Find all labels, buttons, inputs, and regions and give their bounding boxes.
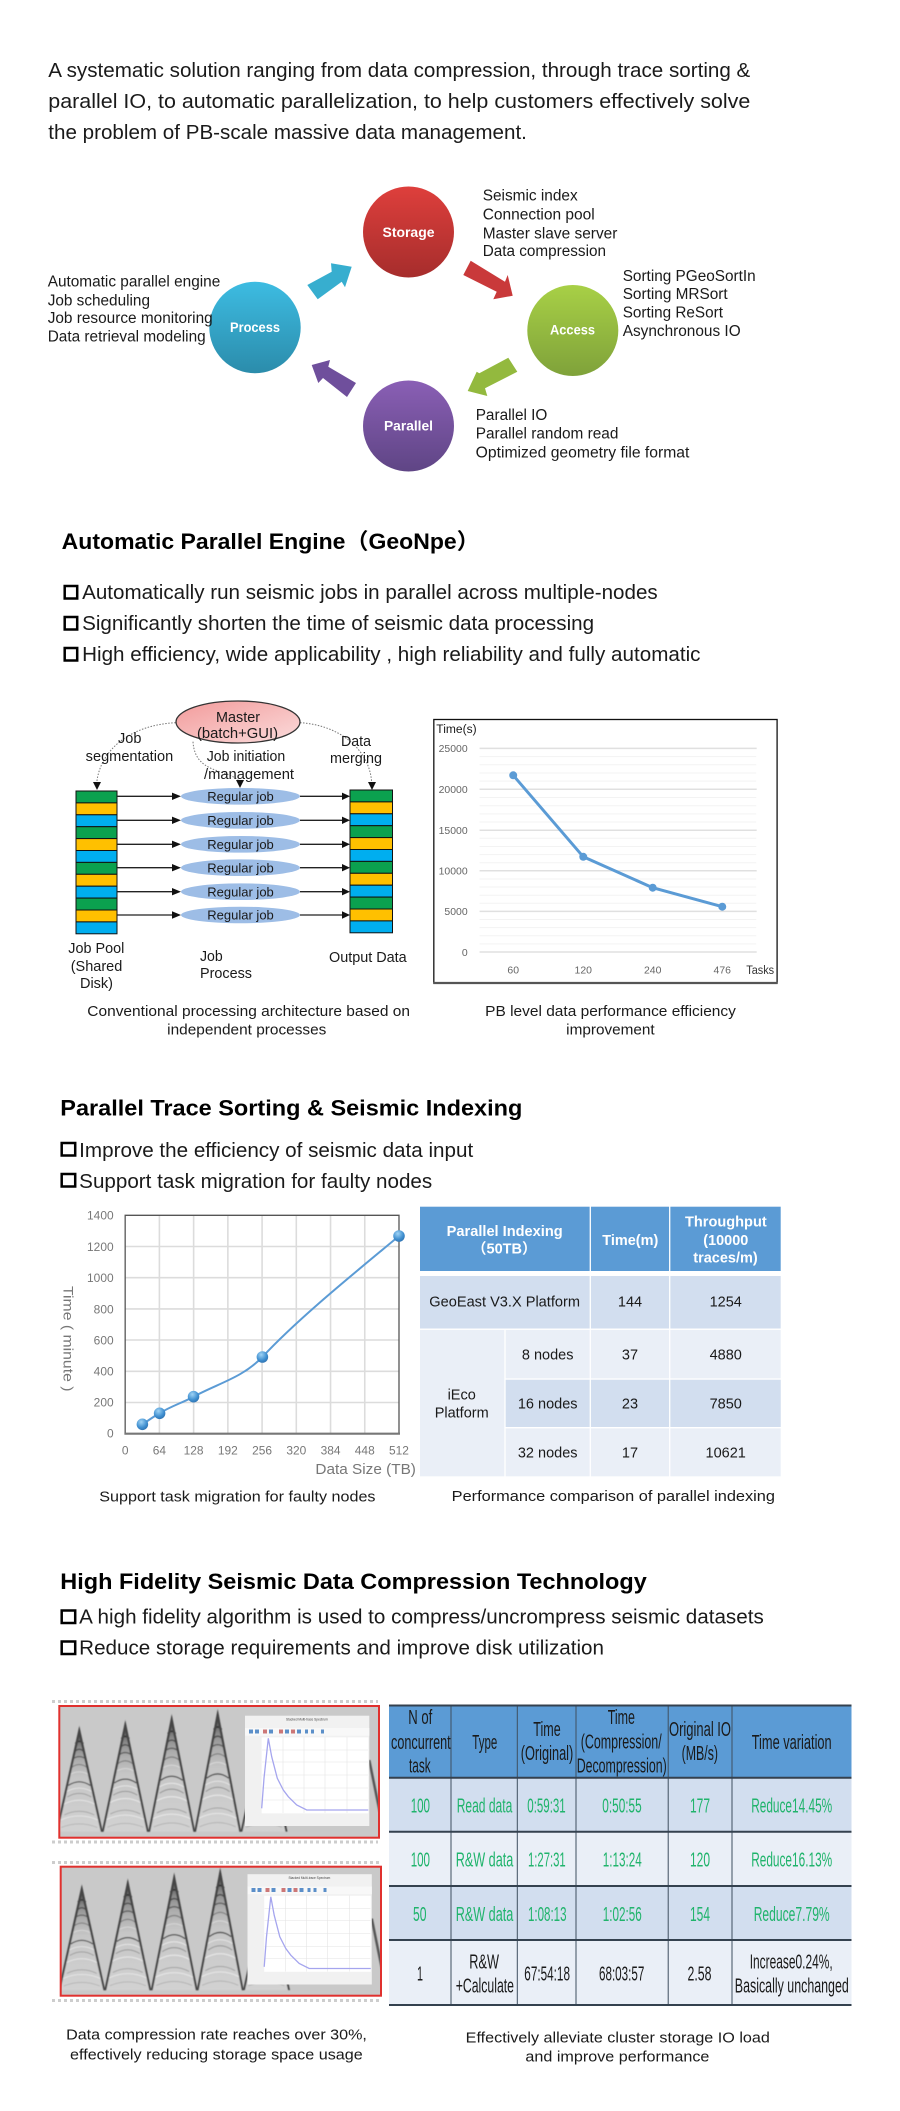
seismic section image: compressed [52,1858,388,2004]
list: parallel features: Optimized geometry file format [476,444,690,461]
captions: automatic parallel engine [87,1004,737,1039]
row: r&w data 50: 1:08:13 [528,1904,566,1926]
table: parallel indexing comparison: 4880 [710,1347,742,1363]
diagram labels: Job [118,731,141,747]
line chart: sorting time vs data size: 64 [153,1443,166,1458]
table: parallel indexing comparison: 23 [622,1396,638,1412]
header row: concurrent [391,1732,451,1754]
line chart: sorting time vs data size: 512 [389,1443,409,1458]
intro paragraph: the problem of PB-scale massive data management. [48,121,527,144]
list: storage features: Seismic index [483,188,578,205]
line chart: sorting time vs data size: 192 [218,1443,238,1458]
list: access features: Asynchronous IO [623,323,741,340]
captions: automatic parallel engine: Conventional processing architecture based on [87,1004,410,1020]
line chart: PB level performance: 60 [507,965,519,977]
captions: parallel trace sorting: Support task migration for faulty nodes [99,1490,376,1506]
table: parallel indexing comparison: Time(m) [602,1233,658,1249]
header row: Time [533,1719,561,1741]
table: parallel indexing comparison: （50TB） [472,1240,536,1257]
diagram labels: /management [204,767,294,783]
line chart: PB level performance: 5000 [444,907,468,918]
master ellipse: Master [216,710,260,726]
line chart: sorting time vs data size: 384 [321,1443,341,1458]
line chart: sorting time vs data size: 256 [252,1443,272,1458]
master ellipse: (batch+GUI) [197,726,278,742]
line chart: sorting time vs data size: 400 [94,1364,114,1379]
captions: automatic parallel engine: independent processes [167,1023,326,1039]
regular job ellipses: Regular job [207,813,274,828]
table: parallel indexing comparison: Platform [435,1405,489,1421]
line chart: sorting time vs data size: 800 [94,1302,114,1317]
list: process features: Job scheduling [48,292,150,310]
row: r&w calculate: R&W [469,1951,499,1973]
row: r&w calculate: 1 [417,1964,423,1986]
header row: (Original) [521,1743,573,1765]
diagram labels: segmentation [86,749,173,765]
bullets: parallel trace sorting: Improve the efficiency of seismic data input [79,1139,474,1162]
row: r&w calculate: 68:03:57 [599,1964,644,1986]
diagram labels: Data [341,734,372,750]
line chart: PB level performance: 476 [714,965,731,977]
bullets: automatic parallel engine: High efficiency, wide applicability , high reliability and fully automatic [82,643,701,666]
table: parallel indexing comparison: 1254 [710,1295,742,1311]
row: read data 100: 0:50:55 [602,1796,642,1818]
table: parallel indexing comparison: 7850 [710,1396,742,1412]
row: read data 100: Read data [457,1796,513,1818]
captions: data compression: Data compression rate reaches over 30%, [66,2028,367,2044]
table: parallel indexing comparison: 17 [622,1446,638,1462]
row: r&w data 50: 1:02:56 [603,1904,642,1926]
row: r&w data 100: 1:13:24 [603,1850,642,1872]
list: process features [48,274,220,346]
diagram labels: Job [200,949,223,965]
row: r&w calculate [417,1951,849,1998]
row: r&w data 50 [413,1904,830,1926]
line chart: sorting time vs data size: 128 [184,1443,204,1458]
list: process features: Job resource monitoring [48,310,213,327]
header row: Type [472,1732,497,1754]
diagram: conventional processing architecture [68,701,408,992]
node: parallel [363,380,454,472]
line chart: sorting time vs data size: 600 [94,1333,114,1348]
row: r&w calculate: +Calculate [456,1976,514,1998]
table: parallel indexing comparison: 37 [622,1347,638,1363]
line chart: sorting time vs data size: 1400 [87,1208,114,1223]
table: parallel indexing comparison: Throughput [685,1215,767,1231]
node: storage [363,186,454,278]
list: parallel features: Parallel random read [476,426,618,443]
regular job ellipses: Regular job [207,860,274,875]
line chart: sorting time vs data size: 448 [355,1443,375,1458]
dotted connectors [97,723,372,783]
row: read data 100: 0:59:31 [527,1796,566,1818]
list: access features: Sorting MRSort [623,286,728,303]
row: r&w data 50: R&W data [456,1904,514,1926]
line chart: sorting time vs data size: 0 [122,1443,129,1458]
row: read data 100: 177 [690,1796,710,1818]
intro paragraph: A systematic solution ranging from data compression, through trace sorting & [48,59,751,82]
captions: parallel trace sorting: Performance comparison of parallel indexing [452,1489,775,1505]
table: parallel indexing comparison: 8 nodes [522,1347,574,1363]
regular job ellipses: Regular job [207,789,274,804]
node: storage: Storage [382,225,435,240]
table: parallel indexing comparison: traces/m) [693,1251,758,1267]
regular job ellipses [181,788,300,923]
line chart: sorting time vs data size: Data Size (TB) [315,1462,416,1478]
table: parallel indexing comparison [420,1206,781,1476]
intro paragraph: parallel IO, to automatic parallelization, to help customers effectively solve [48,90,750,113]
heading: automatic parallel engine: Automatic Parallel Engine（GeoNpe） [62,529,480,554]
row: r&w data 100 [411,1850,832,1872]
row: r&w data 100: 1:27:31 [528,1850,566,1872]
list: parallel features [476,407,690,461]
bullets: data compression [62,1606,764,1660]
table: parallel indexing comparison: 32 nodes [518,1446,578,1462]
line chart: sorting time vs data size: 0 [107,1426,114,1441]
node: process [209,282,301,373]
diagram labels: Disk) [80,976,113,992]
line chart: PB level performance: 20000 [439,785,468,796]
diagram labels: Output Data [329,950,408,966]
line chart: sorting time vs data size: Time ( minute ) [61,1286,77,1391]
heading: data compression: High Fidelity Seismic Data Compression Technology [60,1569,648,1594]
node: parallel: Parallel [384,418,433,434]
line chart: PB level performance: 15000 [439,826,468,837]
table: parallel indexing comparison: 16 nodes [518,1396,578,1412]
row: r&w calculate: 67:54:18 [524,1964,570,1986]
captions: automatic parallel engine: improvement [566,1023,655,1039]
regular job ellipses: Regular job [207,884,274,899]
diagram labels: Job Pool [68,941,124,957]
bullets: data compression: Reduce storage requirements and improve disk utilization [79,1636,604,1660]
job pool stack [76,791,117,934]
header row: Time variation [752,1732,832,1754]
captions: automatic parallel engine: PB level data performance efficiency [485,1004,737,1020]
line chart: PB level performance: 120 [575,965,592,977]
table: parallel indexing comparison: 144 [618,1295,642,1311]
line chart: PB level performance: Time(s) [436,722,477,736]
diagram labels: merging [330,751,382,767]
row: r&w data 100: R&W data [456,1850,514,1872]
list: process features: Data retrieval modeling [48,329,206,346]
row: r&w calculate: 2.58 [688,1964,712,1986]
row: read data 100: Reduce14.45% [751,1796,832,1818]
list: access features: Sorting PGeoSortIn [623,268,756,285]
list: storage features [483,188,617,260]
table: parallel indexing comparison: iEco [448,1387,476,1403]
list: storage features: Data compression [483,243,606,260]
seismic section image: original [52,1700,385,1845]
table: parallel indexing comparison: 10621 [706,1446,746,1462]
bullets: parallel trace sorting: Support task migration for faulty nodes [79,1170,432,1193]
node: access [527,285,618,376]
line chart: PB level performance [433,720,778,983]
line chart: PB level performance: 240 [644,965,662,977]
row: r&w data 100: 100 [411,1850,430,1872]
line chart: sorting time vs data size: 1000 [87,1271,114,1285]
captions: data compression: and improve performance [525,2050,709,2066]
line chart: sorting time vs data size: 1200 [87,1240,114,1254]
list: access features: Sorting ReSort [623,305,724,322]
row: read data 100 [411,1796,832,1818]
diagram labels [68,731,408,992]
bullets: automatic parallel engine [65,581,700,666]
arrow: access to parallel [468,358,517,396]
arrow: parallel to process [312,360,356,397]
line chart: sorting time vs data size [61,1208,416,1478]
row: r&w data 50: 50 [413,1904,426,1926]
bullets: automatic parallel engine: Significantly shorten the time of seismic data processing [82,612,594,635]
diagram labels: (Shared [71,959,122,975]
output data stack [350,790,392,933]
intro paragraph [48,59,751,144]
header row: Decompression) [577,1755,667,1777]
master ellipse [176,701,300,743]
connector arrowheads [93,780,376,790]
table: compression IO results [389,1705,852,2005]
list: storage features: Connection pool [483,206,595,223]
captions: data compression: Effectively alleviate cluster storage IO load [466,2030,770,2046]
header row: Time [608,1707,635,1729]
bullets: parallel trace sorting [62,1139,474,1193]
arrow: process to storage [307,263,352,299]
captions: data compression [66,2028,770,2066]
header row: (MB/s) [682,1743,718,1765]
node: process: Process [230,320,280,335]
line chart: PB level performance: 0 [462,948,468,959]
row: r&w calculate: Increase0.24%, [750,1951,833,1973]
list: access features [623,268,756,340]
flow arrows [117,793,350,919]
table: parallel indexing comparison: GeoEast V3.X Platform [429,1295,580,1311]
line chart: PB level performance: Tasks [746,963,774,977]
line chart: PB level performance: 25000 [439,744,468,755]
list: storage features: Master slave server [483,225,617,242]
bullets: automatic parallel engine: Automatically run seismic jobs in parallel across multiple-nodes [82,581,658,604]
row: read data 100: 100 [411,1796,430,1818]
cycle diagram [48,186,756,472]
list: process features: Automatic parallel engine [48,274,220,291]
row: r&w data 100: 120 [690,1850,710,1872]
diagram labels: Process [200,966,252,982]
table: parallel indexing comparison: Parallel Indexing [447,1224,563,1240]
line chart: sorting time vs data size: 200 [94,1395,114,1410]
row: r&w data 100: Reduce16.13% [751,1850,832,1872]
header row: task [409,1755,431,1777]
regular job ellipses: Regular job [207,908,274,923]
node: access: Access [550,322,595,337]
captions: parallel trace sorting [99,1489,775,1506]
header row: Original IO [669,1719,731,1741]
header row: N of [408,1707,433,1729]
heading: parallel trace sorting: Parallel Trace Sorting & Seismic Indexing [60,1096,522,1120]
header row: (Compression/ [581,1731,662,1753]
bullets: data compression: A high fidelity algorithm is used to compress/uncrompress seismic datasets [79,1606,764,1628]
captions: data compression: effectively reducing storage space usage [70,2048,363,2064]
line chart: PB level performance: 10000 [439,867,468,878]
header row [391,1707,832,1777]
row: r&w data 50: Reduce7.79% [754,1904,830,1926]
diagram labels: Job initiation [207,749,285,765]
row: r&w data 50: 154 [690,1904,710,1926]
regular job ellipses: Regular job [207,837,274,852]
line chart: sorting time vs data size: 320 [286,1443,307,1458]
table: parallel indexing comparison: (10000 [703,1233,748,1249]
arrow: storage to access [463,261,513,299]
list: parallel features: Parallel IO [476,407,547,424]
